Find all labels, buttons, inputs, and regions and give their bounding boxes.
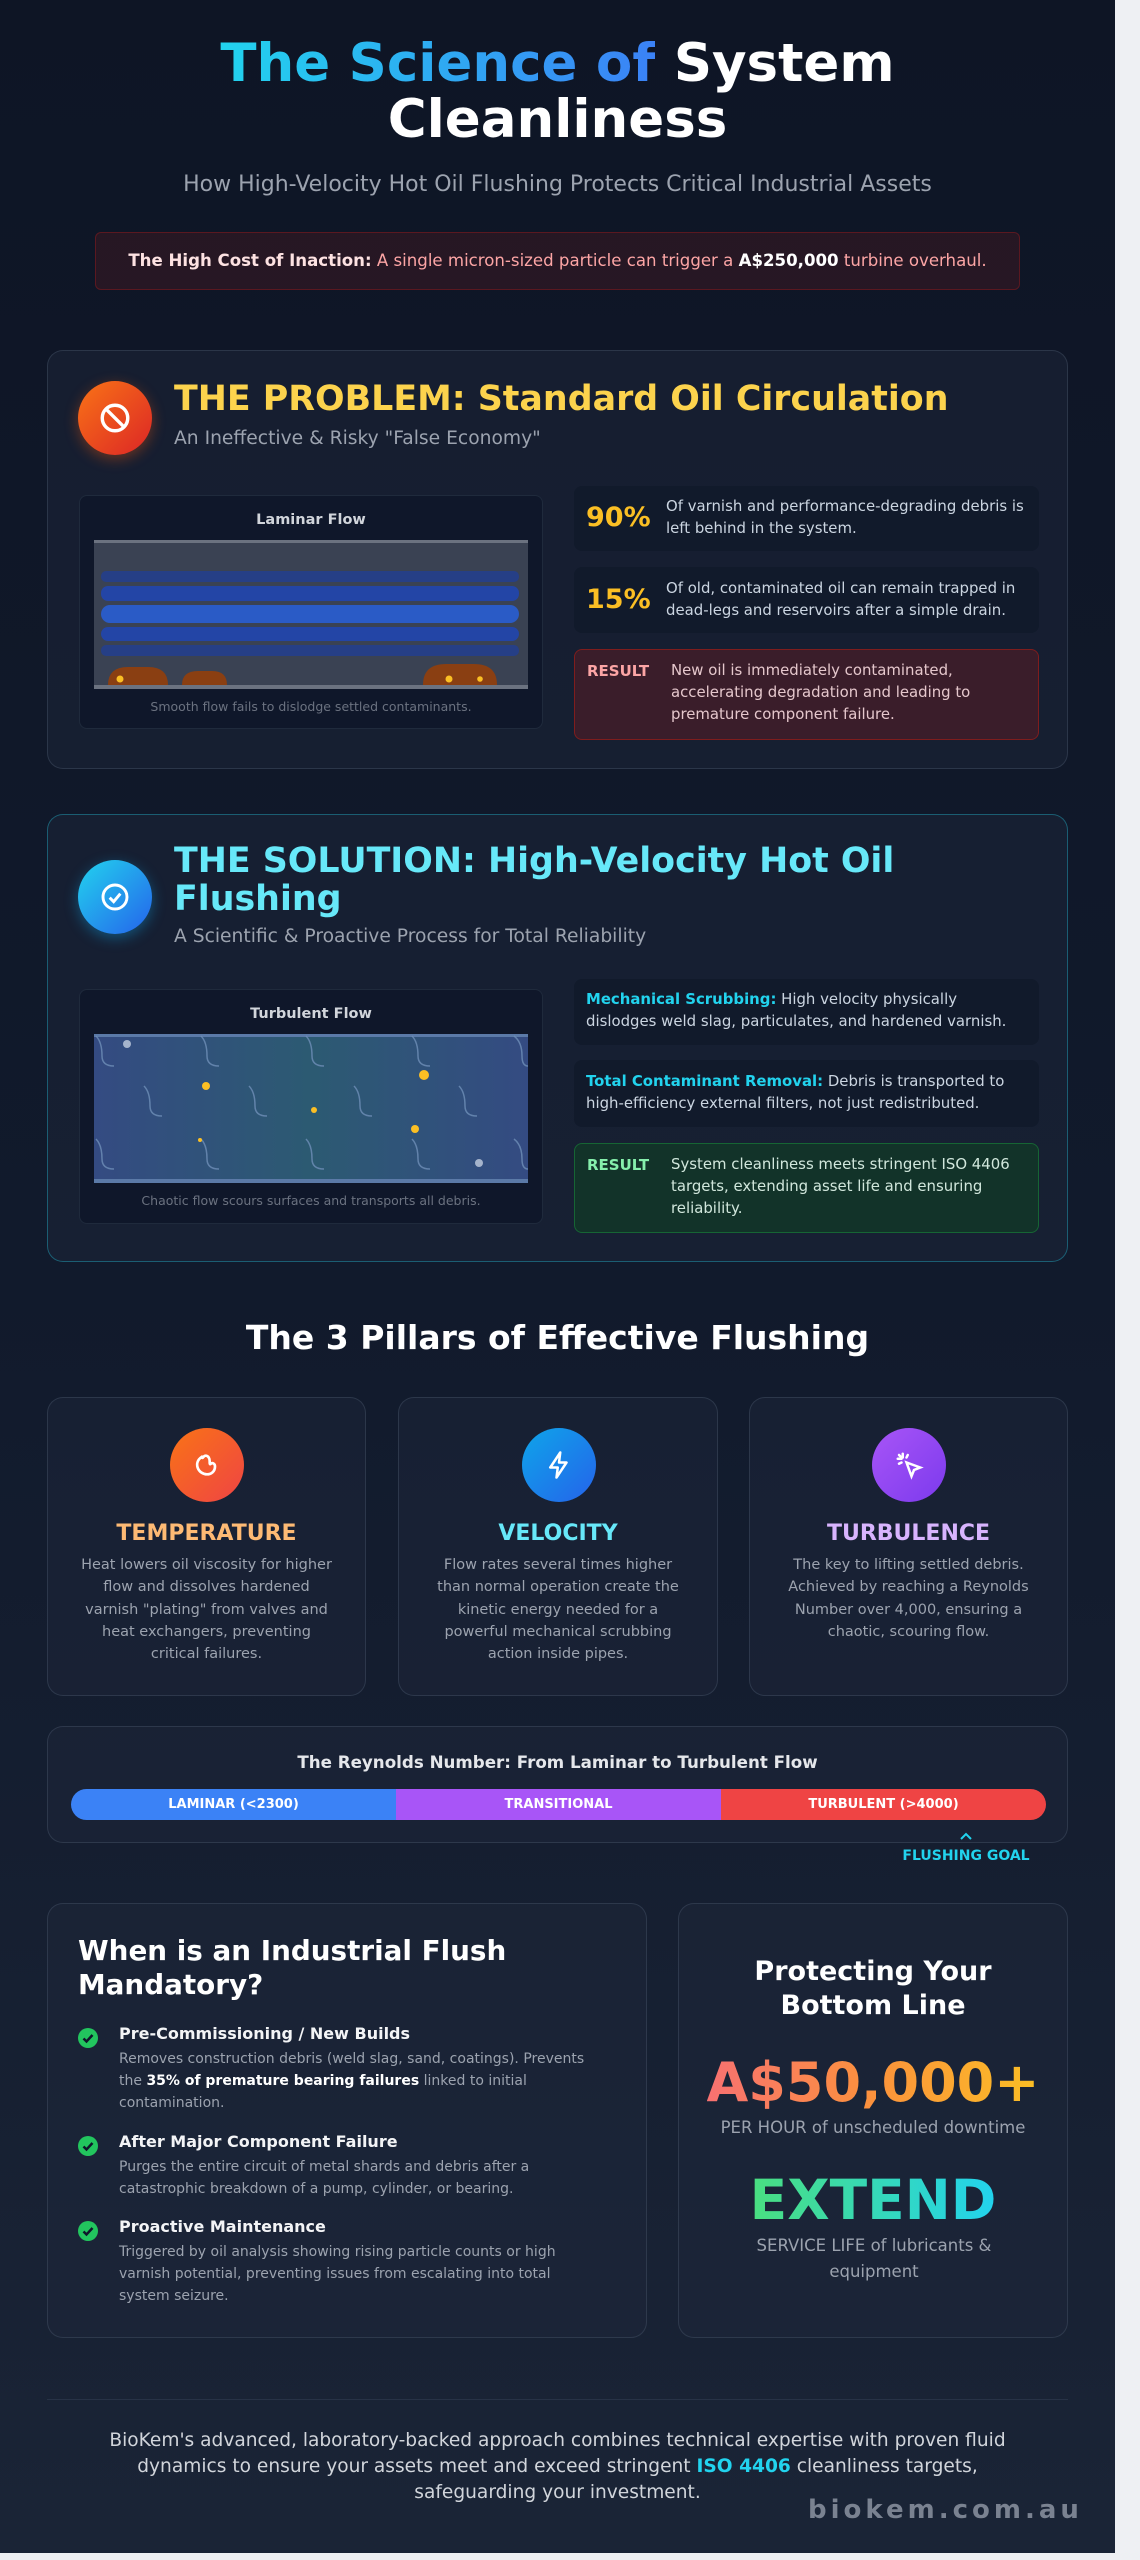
pillar: temperature: TEMPERATURE [116,1521,297,1546]
result: solution: System cleanliness meets stringent ISO 4406 targets, extending asset life and ensuring reliability. [671,1155,1010,1217]
bar: flow regimes [71,1789,1046,1820]
panel: when mandatory: When is an Industrial Flush [78,1934,506,1967]
title: Cleanliness [388,89,727,150]
panel: when mandatory: Removes construction debris (weld slag, sand, coatings). Prevents the 35% of premature bearing failures linked to initial contamination. [119,2051,584,2111]
diagram: laminar flow [79,495,543,729]
result: solution [574,1143,1039,1233]
diagram: turbulent flow: Chaotic flow scours surfaces and transports all debris. [141,1193,481,1208]
pillar: velocity: Flow rates several times higher than normal operation create the kinetic energy needed for a powerful mechanical scrubbing action inside pipes. [437,1557,679,1662]
item: proactive maintenance [78,2217,556,2304]
result: problem: New oil is immediately contaminated, accelerating degradation and leading to premature component failure. [671,661,970,723]
subheading: solution: A Scientific & Proactive Process for Total Reliability [174,926,646,947]
callout: flushing goal: FLUSHING GOAL [902,1848,1030,1864]
bar: flow regimes: LAMINAR (<2300) [168,1797,299,1812]
watermark: biokem.com.au: biokem.com.au [808,2495,1083,2525]
subheading: problem: An Ineffective & Risky "False Economy" [174,428,541,449]
panel: bottom line: Bottom Line [780,1990,966,2021]
pillar: turbulence: TURBULENCE [827,1521,990,1546]
stat: 90% [574,486,1039,551]
footer text: BioKem's advanced, laboratory-backed approach combines technical expertise with proven fluid dynamics to ensure your assets meet and exceed stringent ISO 4406 cleanliness targets, safeguarding your investment. [109,2430,1006,2503]
result: problem [574,649,1039,740]
stat: downtime cost: A$50,000+ [706,2051,1040,2114]
panel: when mandatory: Purges the entire circuit of metal shards and debris after a catastrophic breakdown of a pump, cylinder, or bearing. [119,2159,529,2197]
stat: 90%: Of varnish and performance-degrading debris is left behind in the system. [666,497,1024,537]
bar: flow regimes: TURBULENT (>4000) [808,1797,959,1812]
result: solution: RESULT [587,1156,649,1174]
diagram: turbulent flow: Turbulent Flow [250,1006,372,1022]
stat: 90%: 90% [586,502,651,533]
pillar: velocity: VELOCITY [498,1521,618,1546]
diagram: turbulent flow [79,989,543,1224]
panel: reynolds number: The Reynolds Number: From Laminar to Turbulent Flow [297,1752,818,1772]
panel: bottom line [678,1903,1068,2338]
point: mechanical scrubbing: Mechanical Scrubbing: High velocity physically dislodges weld slag, particulates, and hardened varnish. [586,990,1006,1030]
stat: extend: EXTEND [750,2168,996,2232]
panel: bottom line: PER HOUR of unscheduled downtime [721,2118,1025,2137]
panel: bottom line: Protecting Your [754,1956,992,1987]
diagram: laminar flow: Laminar Flow [256,512,366,528]
subtitle: How High-Velocity Hot Oil Flushing Protects Critical Industrial Assets [183,172,932,197]
pillar: turbulence [749,1397,1068,1696]
stat: 15%: Of old, contaminated oil can remain trapped in dead-legs and reservoirs after a simple drain. [666,579,1015,619]
diagram: laminar flow: Smooth flow fails to dislodge settled contaminants. [150,699,472,714]
panel: when mandatory: Mandatory? [78,1968,263,2001]
panel: when mandatory: Triggered by oil analysis showing rising particle counts or high varnish potential, preventing issues from escalating into total system seizure. [119,2244,556,2304]
heading: solution: THE SOLUTION: High-Velocity Hot Oil Flushing [174,841,894,919]
callout: flushing goal [902,1832,1030,1864]
pillar: turbulence: The key to lifting settled debris. Achieved by reaching a Reynolds Number over 4,000, ensuring a chaotic, scouring flow. [788,1557,1029,1640]
bar: flow regimes: TRANSITIONAL [504,1797,612,1812]
panel: bottom line: SERVICE LIFE of lubricants & equipment [757,2236,991,2281]
title: The Science of System [220,33,895,94]
panel: reynolds number [47,1726,1068,1843]
item: pre-commissioning [78,2024,584,2111]
point: contaminant removal [574,1060,1039,1127]
pillar: temperature [47,1397,366,1696]
heading: problem: THE PROBLEM: Standard Oil Circulation [174,379,948,419]
item: component failure [78,2132,529,2197]
icon: prohibited [78,381,152,455]
icon: pointer burst [872,1428,946,1502]
panel: when mandatory: Pre-Commissioning / New Builds [119,2024,410,2043]
icon: check [78,860,152,934]
pillar: temperature: Heat lowers oil viscosity for higher flow and dissolves hardened varnish "plating" from valves and heat exchangers, preventing critical failures. [81,1557,332,1662]
panel: solution [47,814,1068,1262]
heading: pillars: The 3 Pillars of Effective Flushing [246,1318,869,1357]
stat: 15% [574,567,1039,633]
title [220,33,895,150]
result: problem: RESULT [587,662,649,680]
panel: when mandatory: Proactive Maintenance [119,2217,326,2236]
panel: when mandatory: After Major Component Failure [119,2132,398,2151]
stat: 15%: 15% [586,584,651,615]
point: contaminant removal: Total Contaminant Removal: Debris is transported to high-efficiency external filters, not just redistributed. [586,1072,1004,1112]
icon: flame [170,1428,244,1502]
icon: bolt [522,1428,596,1502]
alert callout: The High Cost of Inaction: A single micron-sized particle can trigger a A$250,000 turbine overhaul. [128,251,987,270]
point: mechanical scrubbing [574,979,1039,1045]
alert callout [95,232,1020,290]
panel: problem [47,350,1068,769]
panel: when mandatory [47,1903,647,2338]
pillar: velocity [398,1397,718,1696]
